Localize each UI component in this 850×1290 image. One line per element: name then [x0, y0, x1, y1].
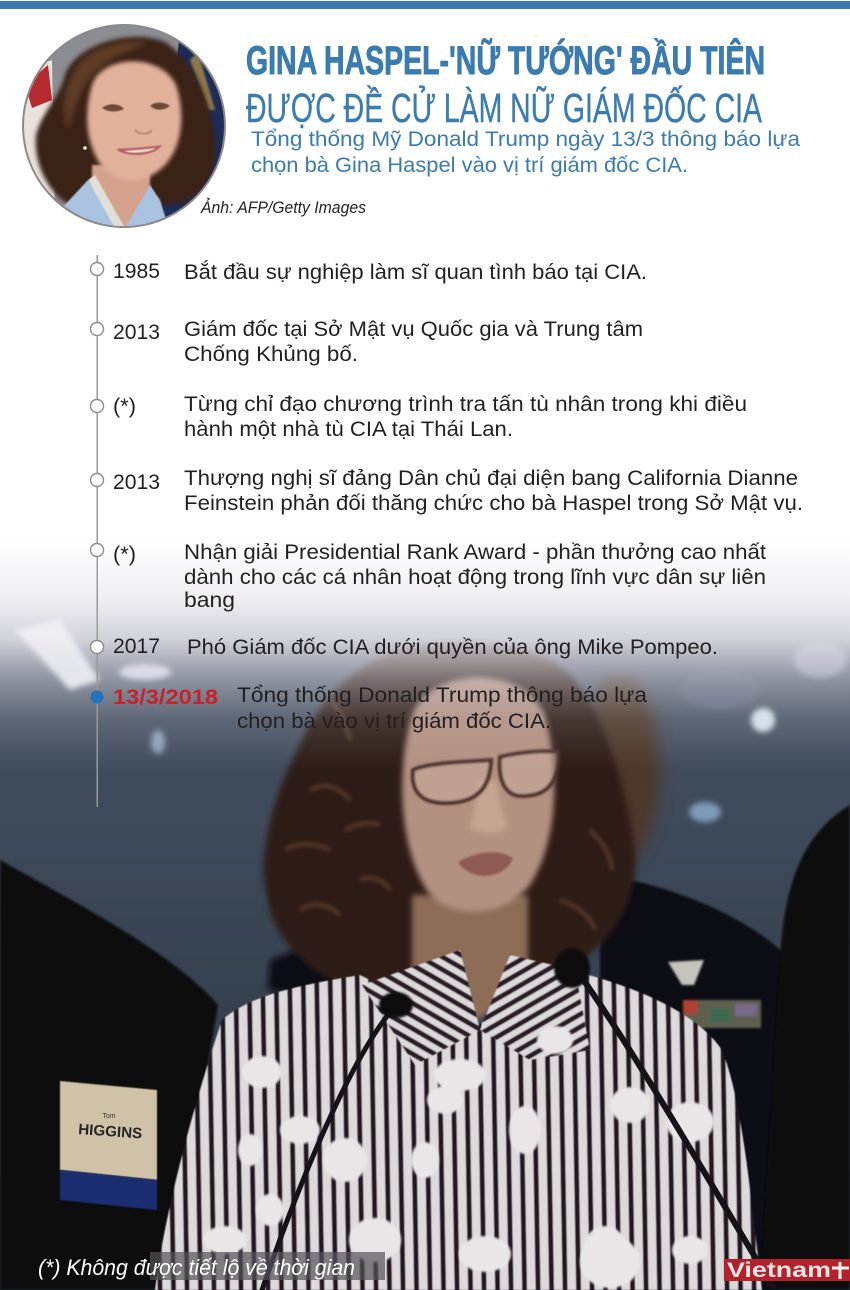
name badge: [60, 1081, 157, 1210]
background photo: speaker at podium: [0, 540, 850, 1290]
face: [87, 61, 181, 180]
timeline markers: [90, 262, 104, 654]
entry: 13/3/2018: [113, 684, 647, 733]
entry: 2013 Feinstein: [113, 467, 803, 515]
white fade over photo: [0, 540, 850, 770]
entry: 2013: Giám đốc tại Sở Mật vụ Quốc gia và Trung tâm: [184, 318, 643, 341]
left person suit: [0, 860, 218, 1290]
bokeh lights: [15, 620, 846, 914]
microphones: [262, 975, 775, 1290]
hair: [264, 642, 635, 987]
top bar: [0, 1, 850, 9]
name badge: Tom: [102, 1113, 116, 1120]
entry: award: Nhận giải Presidential Rank Award - phần thưởng cao nhất: [184, 541, 766, 564]
entry: 2013: 2013: [113, 321, 160, 344]
logo: Vietnam+: Vietnam: [727, 1259, 831, 1282]
timeline axis: [96, 255, 98, 807]
neck: [92, 165, 150, 232]
entry: 2013 Feinstein: Thượng nghị sĩ đảng Dân chủ đại diện bang California Dianne: [184, 467, 798, 490]
subtitle: chọn bà Gina Haspel vào vị trí giám đốc CIA.: [251, 154, 688, 177]
entry: award: [113, 541, 766, 612]
entry: 2017: Phó Giám đốc CIA dưới quyền của ông Mike Pompeo.: [187, 636, 718, 659]
logo: Vietnam+: [724, 1259, 850, 1282]
entry: undisclosed date: Từng chỉ đạo chương trình tra tấn tù nhân trong khi điều: [184, 393, 747, 416]
entry: 1985: Bắt đầu sự nghiệp làm sĩ quan tình báo tại CIA.: [184, 261, 647, 284]
face: [402, 677, 554, 911]
footnote: (*) Không được tiết lộ về thời gian: [38, 1255, 355, 1280]
subtitle: Tổng thống Mỹ Donald Trump ngày 13/3 thông báo lựa: [251, 128, 800, 151]
entry: 13/3/2018: Tổng thống Donald Trump thông báo lựa: [237, 684, 647, 707]
entry: 2013 Feinstein: 2013: [113, 471, 160, 494]
entry: 2013: [113, 318, 643, 366]
title: [246, 37, 765, 131]
lips: [458, 852, 513, 876]
portrait photo: [20, 24, 230, 234]
subtitle: [251, 128, 800, 177]
jacket: [64, 180, 166, 226]
entry: 13/3/2018: chọn bà vào vị trí giám đốc CIA.: [237, 710, 551, 733]
entry: undisclosed date: (*): [113, 395, 136, 418]
collar: [362, 950, 480, 1065]
entry: award: dành cho các cá nhân hoạt động trong lĩnh vực dân sự liên: [184, 566, 766, 589]
photo credit: Ảnh: AFP/Getty Images: [200, 198, 366, 217]
glasses: [413, 751, 558, 803]
entry: 1985: 1985: [113, 260, 160, 283]
neck: [412, 895, 528, 1025]
name badge: HIGGINS: [78, 1121, 143, 1142]
right person suit: [600, 875, 790, 1290]
current marker: [90, 690, 104, 704]
entry: 2013 Feinstein: Feinstein phản đối thăng chức cho bà Haspel trong Sở Mật vụ.: [184, 492, 803, 515]
timeline: [90, 255, 803, 807]
entry: 2017: 2017: [113, 635, 160, 658]
entry: undisclosed date: [113, 393, 747, 441]
shirt print blotches: [203, 1026, 714, 1288]
entry: 2013: Chống Khủng bố.: [184, 343, 358, 366]
entry: award: (*): [113, 543, 136, 566]
shirt: [155, 970, 762, 1290]
hair: [36, 37, 216, 205]
entry: undisclosed date: hành một nhà tù CIA tại Thái Lan.: [184, 418, 513, 441]
entry: 13/3/2018: 13/3/2018: [113, 686, 218, 709]
background man head: [580, 675, 660, 865]
military medals: [668, 960, 761, 1028]
entry: award: bang: [184, 589, 235, 612]
